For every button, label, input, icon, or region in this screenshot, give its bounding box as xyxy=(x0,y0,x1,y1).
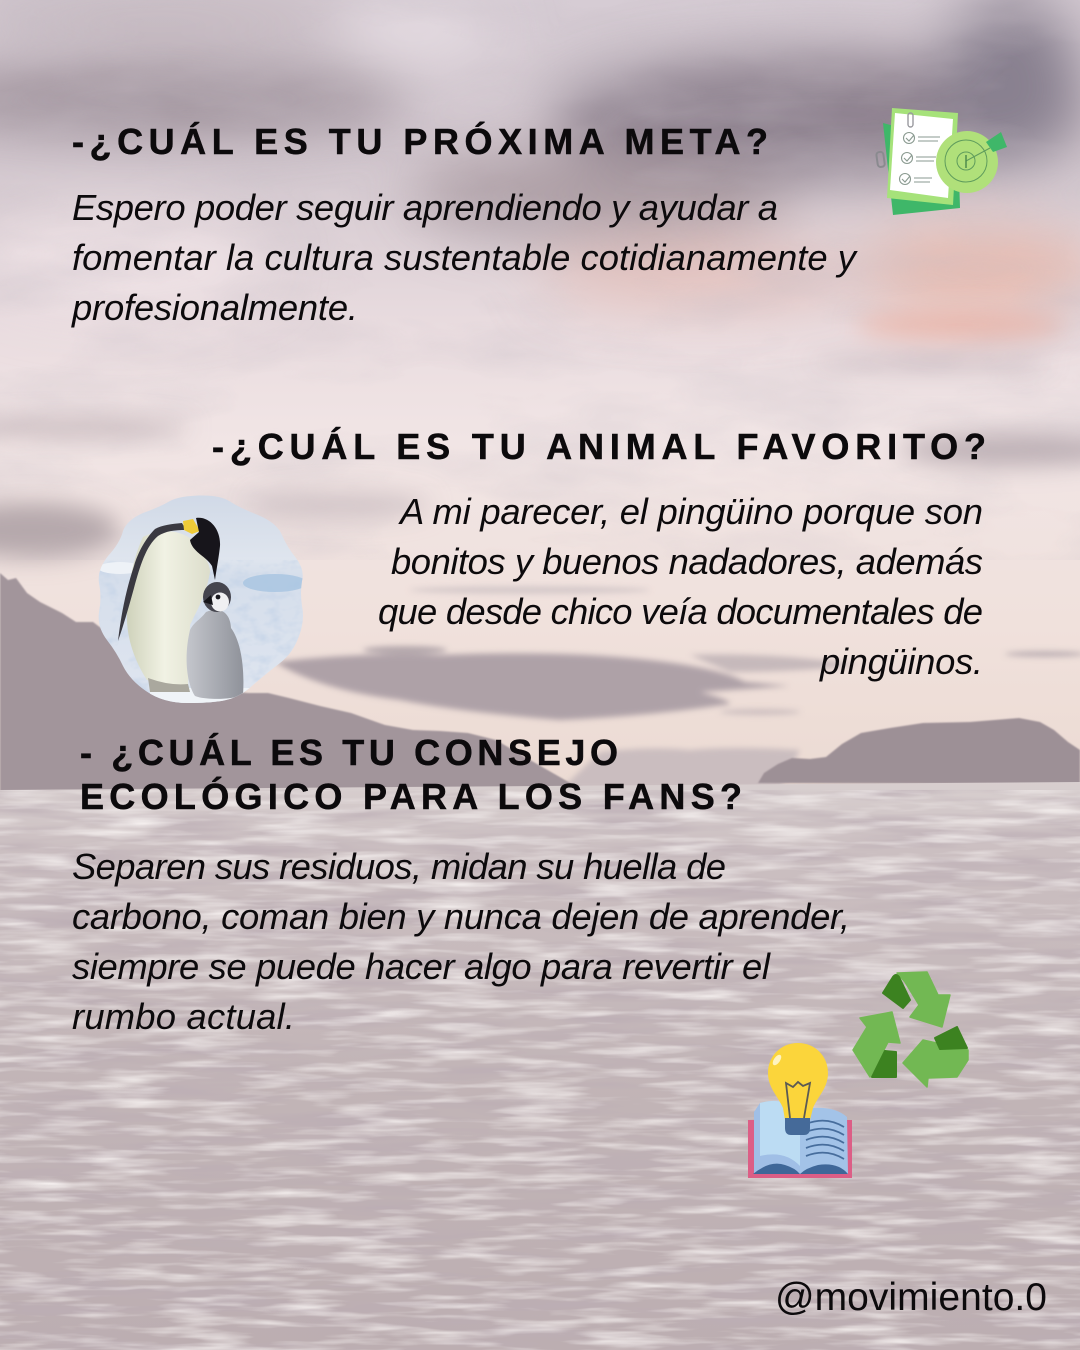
penguin adult body xyxy=(127,531,210,688)
text block: eco advice answer: rumbo actual. xyxy=(72,996,295,1037)
text: social handle: @movimiento.0 xyxy=(775,1276,1047,1319)
text block: eco advice answer xyxy=(72,846,850,1037)
text block: favourite animal answer: pingüinos. xyxy=(819,641,983,682)
text block: favourite animal answer: bonitos y buenos nadadores, además xyxy=(391,541,983,582)
text block: eco advice answer: siempre se puede hacer algo para revertir el xyxy=(72,946,771,987)
background: sea xyxy=(0,782,1080,1350)
text block: next goal answer: Espero poder seguir aprendiendo y ayudar a xyxy=(72,187,778,228)
chick xyxy=(187,610,243,699)
heading: favourite animal: -¿CUÁL ES TU ANIMAL FAVORITO? xyxy=(212,426,986,467)
text block: next goal answer: fomentar la cultura sustentable cotidianamente y xyxy=(72,237,859,278)
text block: next goal answer xyxy=(71,187,859,328)
text block: next goal answer: profesionalmente. xyxy=(71,287,358,328)
heading: eco advice xyxy=(80,732,742,817)
icon: checklist and target xyxy=(876,108,1007,215)
heading: eco advice: - ¿CUÁL ES TU CONSEJO xyxy=(80,732,618,773)
background: sunset sky xyxy=(0,0,1080,800)
icon: recycling symbol xyxy=(853,972,968,1087)
text block: favourite animal answer: que desde chico veía documentales de xyxy=(378,591,983,632)
text block: eco advice answer: Separen sus residuos, midan su huella de xyxy=(72,846,726,887)
text block: eco advice answer: carbono, coman bien y nunca dejen de aprender, xyxy=(72,896,850,937)
image: penguins in scalloped frame xyxy=(98,496,303,703)
text block: favourite animal answer xyxy=(378,491,983,682)
heading: eco advice: ECOLÓGICO PARA LOS FANS? xyxy=(80,775,742,817)
heading: next goal: -¿CUÁL ES TU PRÓXIMA META? xyxy=(72,120,768,162)
background: hills xyxy=(0,573,1080,792)
icon: book and light bulb xyxy=(748,1043,852,1178)
text block: favourite animal answer: A mi parecer, el pingüino porque son xyxy=(398,491,983,532)
